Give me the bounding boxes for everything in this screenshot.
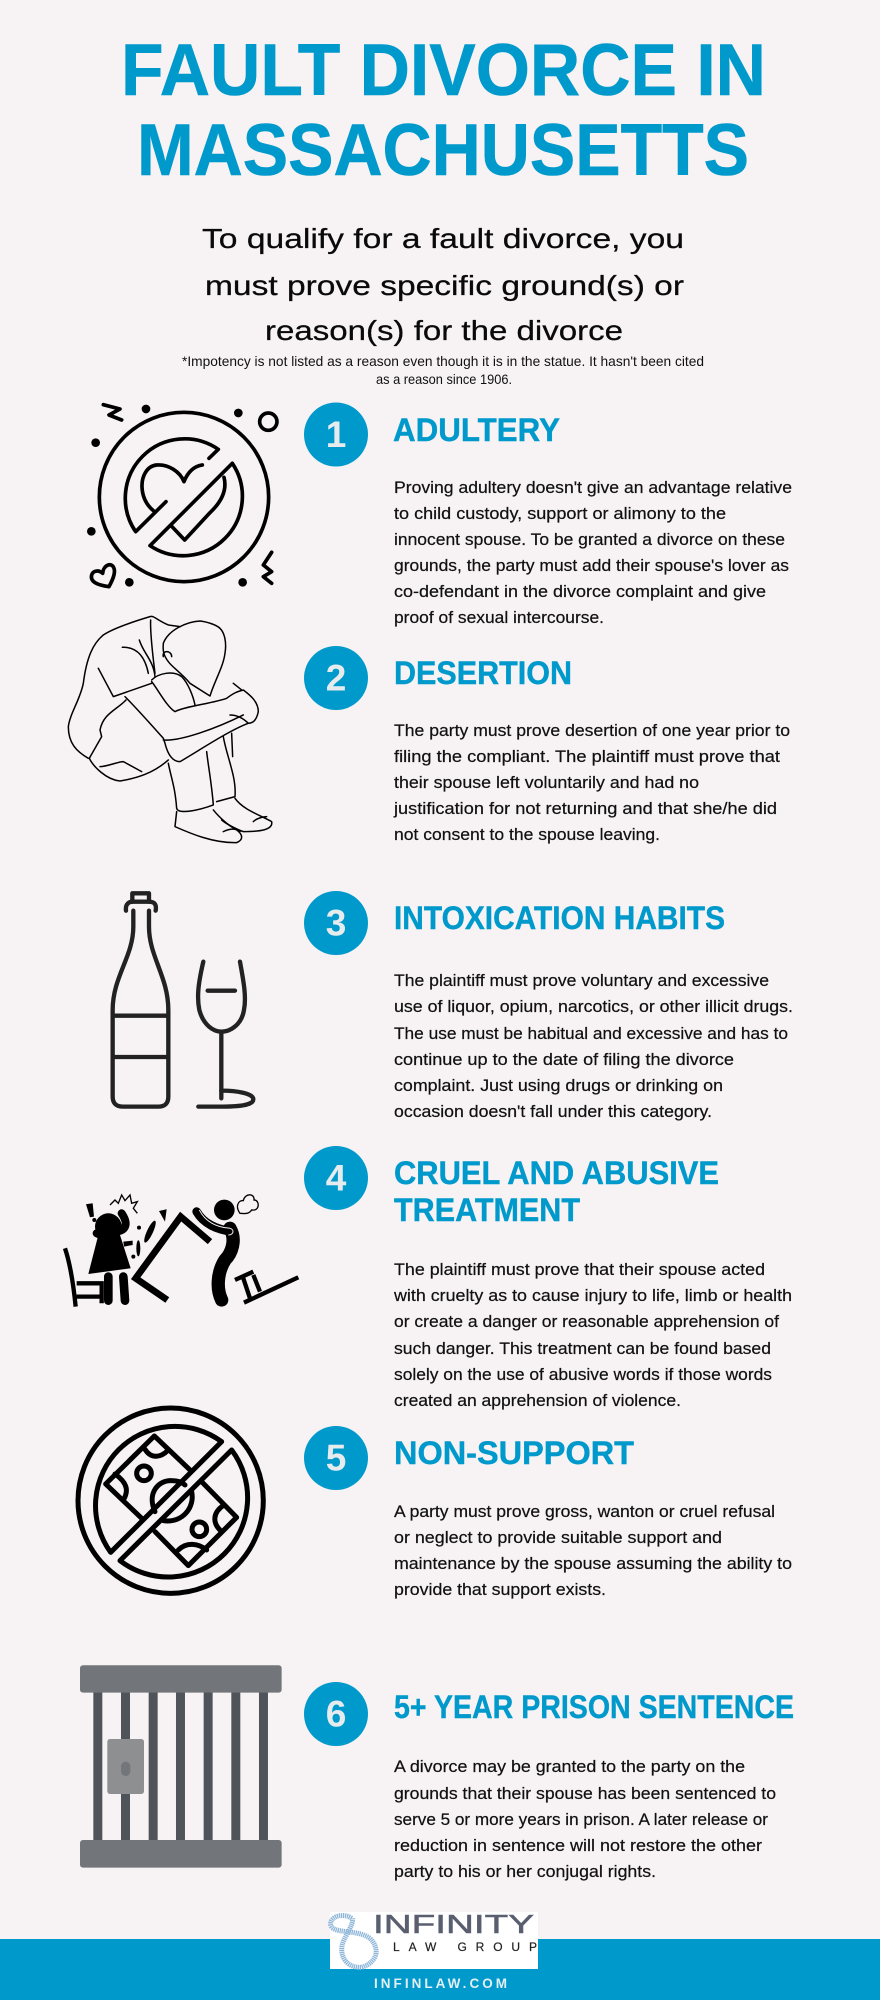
icon: man flipping table at woman (65, 1195, 298, 1307)
logo: Infinity Law Group (330, 1909, 538, 1969)
text: desertion body: not consent to the spouse leaving. (394, 825, 660, 844)
heading: cruel and abusive treatment (394, 1155, 719, 1228)
text: prison sentence body: A divorce may be granted to the party on the (394, 1757, 745, 1776)
text: intoxication body: The plaintiff must prove voluntary and excessive (394, 971, 769, 990)
subtitle: reason(s) for the divorce (265, 315, 623, 346)
heading: non-support: NON-SUPPORT (394, 1435, 634, 1471)
subtitle (202, 223, 684, 346)
icon: prison bars (80, 1665, 282, 1868)
text: cruel treatment body: The plaintiff must prove that their spouse acted (394, 1260, 765, 1279)
logo: Infinity Law Group: INFINITY (373, 1909, 534, 1939)
text: adultery body: Proving adultery doesn't give an advantage relative (394, 478, 792, 497)
subtitle: To qualify for a fault divorce, you (202, 223, 684, 254)
heading: intoxication habits: INTOXICATION HABITS (394, 900, 725, 936)
text: prison sentence body: grounds that their spouse has been sentenced to (394, 1784, 776, 1803)
footnote (182, 353, 704, 387)
heading: prison sentence: 5+ YEAR PRISON SENTENCE (394, 1689, 794, 1725)
heading: adultery: ADULTERY (393, 412, 560, 448)
title: FAULT DIVORCE IN (121, 30, 766, 111)
panel: prison sentence (304, 1682, 794, 1881)
text: intoxication body: use of liquor, opium, narcotics, or other illicit drugs. (394, 997, 793, 1016)
text: non-support body: provide that support exists. (394, 1580, 606, 1599)
number badge 6: 6 (326, 1694, 346, 1734)
footnote: *Impotency is not listed as a reason even though it is in the statue. It hasn't been cited (182, 353, 704, 369)
text: non-support body: maintenance by the spouse assuming the ability to (394, 1554, 792, 1573)
text: prison sentence body: party to his or her conjugal rights. (394, 1862, 656, 1881)
text: cruel treatment body: such danger. This treatment can be found based (394, 1339, 771, 1358)
text: intoxication body (394, 971, 793, 1121)
number badge 5: 5 (326, 1438, 346, 1478)
footer band (0, 1939, 880, 2000)
text: cruel treatment body: solely on the use of abusive words if those words (394, 1365, 772, 1384)
icon: infinity loop (331, 1916, 376, 1967)
text: non-support body: A party must prove gross, wanton or cruel refusal (394, 1502, 775, 1521)
number badge 1: 1 (326, 414, 346, 455)
heading: cruel and abusive treatment: CRUEL AND ABUSIVE (394, 1155, 719, 1191)
text: desertion body: justification for not returning and that she/he did (393, 799, 777, 818)
text: cruel treatment body: with cruelty as to cause injury to life, limb or health (393, 1286, 792, 1305)
panel: non-support (304, 1426, 792, 1599)
number badge 3: 3 (326, 902, 346, 944)
number badge 2: 2 (326, 658, 346, 698)
text: intoxication body: occasion doesn't fall under this category. (394, 1102, 712, 1121)
text: adultery body: to child custody, support or alimony to the (394, 504, 726, 523)
panel: desertion (304, 646, 790, 844)
text: desertion body: filing the compliant. The plaintiff must prove that (394, 747, 780, 766)
text: adultery body: co-defendant in the divorce complaint and give (394, 582, 766, 601)
text: adultery body: innocent spouse. To be granted a divorce on these (394, 530, 785, 549)
icon: no love, crossed-out heart (87, 405, 277, 587)
number badge 3 (304, 891, 368, 955)
number badge 4: 4 (326, 1158, 347, 1198)
heading: cruel and abusive treatment: TREATMENT (394, 1192, 580, 1228)
icon: person sitting with head on knees (68, 616, 272, 843)
text: adultery body: proof of sexual intercourse. (394, 608, 604, 627)
logo: Infinity Law Group: LAW GROUP (393, 1940, 537, 1954)
title: MASSACHUSETTS (137, 110, 749, 191)
number badge 5 (304, 1426, 368, 1490)
subtitle: must prove specific ground(s) or (205, 270, 684, 301)
text: cruel treatment body: created an apprehension of violence. (394, 1391, 681, 1410)
text: non-support body: or neglect to provide suitable support and (394, 1528, 722, 1547)
heading: desertion: DESERTION (394, 655, 572, 691)
panel: adultery (304, 402, 792, 627)
text: prison sentence body (394, 1757, 776, 1881)
text: intoxication body: The use must be habitual and excessive and has to (394, 1024, 788, 1043)
text: cruel treatment body (393, 1260, 792, 1410)
icon: wine bottle and glass (113, 893, 253, 1107)
text: adultery body (394, 478, 792, 627)
title (121, 30, 766, 191)
footnote: as a reason since 1906. (376, 371, 512, 387)
text: desertion body: The party must prove desertion of one year prior to (394, 721, 790, 740)
text: desertion body: their spouse left voluntarily and had no (394, 773, 699, 792)
panel: intoxication habits (304, 891, 793, 1121)
text: desertion body (393, 721, 790, 844)
text: prison sentence body: reduction in sentence will not restore the other (394, 1836, 762, 1855)
text: intoxication body: complaint. Just using drugs or drinking on (394, 1076, 723, 1095)
footer url: INFINLAW.COM (374, 1976, 507, 1991)
text: non-support body (394, 1502, 792, 1599)
text: adultery body: grounds, the party must add their spouse's lover as (394, 556, 789, 575)
panel: cruel and abusive treatment (304, 1146, 792, 1410)
number badge 6 (304, 1682, 368, 1746)
number badge 2 (304, 646, 368, 710)
icon: crossed-out money (78, 1408, 263, 1593)
number badge 4 (304, 1146, 368, 1210)
text: prison sentence body: serve 5 or more years in prison. A later release or (394, 1810, 768, 1829)
text: cruel treatment body: or create a danger or reasonable apprehension of (394, 1312, 779, 1331)
number badge 1 (304, 402, 368, 466)
text: intoxication body: continue up to the date of filing the divorce (394, 1050, 734, 1069)
